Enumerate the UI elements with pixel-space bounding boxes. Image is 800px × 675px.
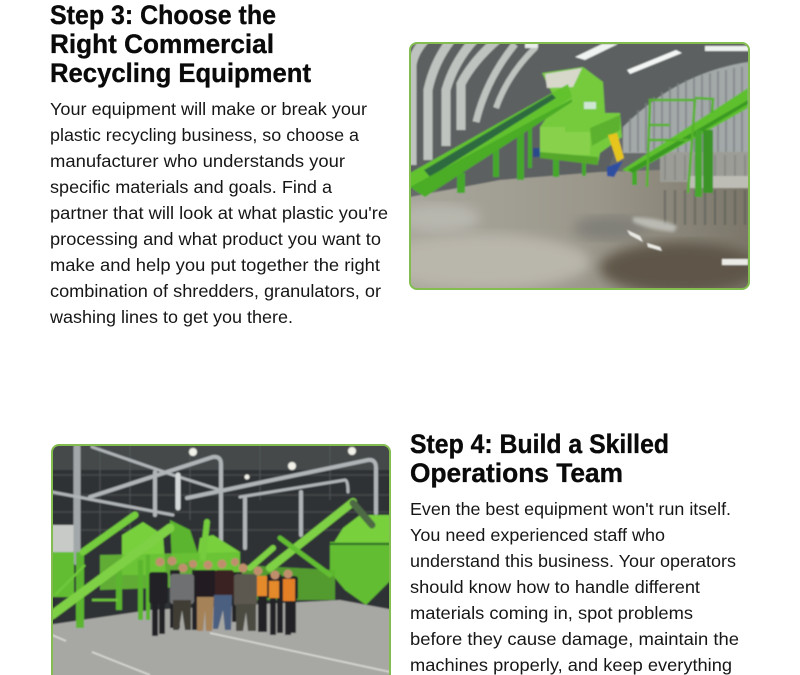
wet concrete floor bbox=[411, 170, 748, 288]
text block: step 3 body: washing lines to get you there. bbox=[49, 307, 293, 327]
ceiling lights bbox=[189, 447, 356, 480]
text block: step 3 body: combination of shredders, granulators, or bbox=[50, 281, 381, 301]
photo: green recycling conveyor machinery in arched hall bbox=[409, 42, 750, 290]
text block: step 4 body: Even the best equipment won't run itself. bbox=[410, 499, 731, 519]
heading: step 3: Recycling Equipment bbox=[50, 58, 311, 88]
right conveyor and frame bbox=[632, 167, 637, 185]
ceiling lights bbox=[575, 44, 618, 60]
green hopper machine bbox=[540, 67, 622, 163]
text block: step 4 body: understand this business. Your operators bbox=[410, 551, 736, 571]
heading: step 4: Operations Team bbox=[410, 458, 623, 488]
text block: step 4 body: machines properly, and keep everything bbox=[410, 655, 732, 675]
back corrugated wall bbox=[623, 61, 755, 153]
text block: step 3 body: processing and what product you want to bbox=[50, 229, 381, 249]
text block: step 4 body: before they cause damage, maintain the bbox=[410, 629, 739, 649]
green image border bbox=[52, 445, 390, 675]
photo: team standing before green recycling line bbox=[48, 440, 394, 675]
green image border bbox=[410, 43, 749, 289]
text block: step 4 body bbox=[410, 499, 739, 675]
heading: step 3 bbox=[50, 0, 311, 88]
silver ducts bbox=[52, 447, 376, 562]
inclined green augers bbox=[52, 502, 372, 615]
green machinery bbox=[333, 515, 394, 544]
text block: step 4 body: materials coming in, spot problems bbox=[410, 603, 693, 623]
text block: step 3 body: plastic recycling business, so choose a bbox=[50, 125, 359, 145]
text block: step 4 body: You need experienced staff who bbox=[410, 525, 665, 545]
text block: step 3 body: make and help you put together the right bbox=[50, 255, 380, 275]
text block: step 3 body: specific materials and goals. Find a bbox=[50, 177, 332, 197]
heading: step 4 bbox=[410, 429, 669, 488]
text block: step 4 body: should know how to handle different bbox=[410, 577, 700, 597]
heading: step 3: Step 3: Choose the bbox=[50, 0, 276, 30]
legs bbox=[456, 128, 587, 194]
group of workers bbox=[149, 556, 298, 636]
text block: step 3 body: manufacturer who understands your bbox=[50, 151, 345, 171]
yellow cylinder and blue motor bbox=[608, 133, 624, 162]
arched ceiling bbox=[405, 38, 755, 190]
text block: step 3 body bbox=[49, 99, 388, 327]
concrete floor bbox=[48, 600, 394, 675]
text block: step 3 body: partner that will look at what plastic you're bbox=[50, 203, 388, 223]
text block: step 3 body: Your equipment will make or break your bbox=[50, 99, 367, 119]
heading: step 3: Right Commercial bbox=[50, 29, 274, 59]
left conveyor bbox=[410, 84, 572, 197]
heading: step 4: Step 4: Build a Skilled bbox=[410, 429, 669, 459]
